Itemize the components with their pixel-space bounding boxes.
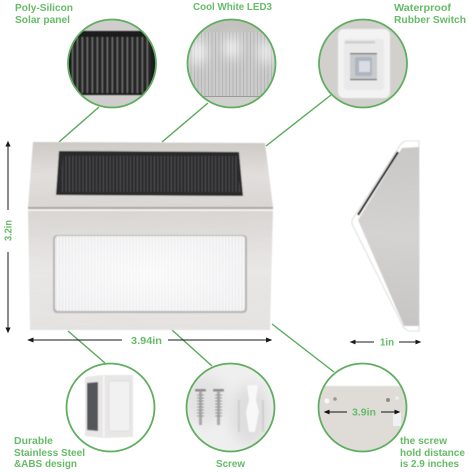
callout: waterproof rubber switch detail — [318, 18, 410, 110]
label: the screw hold distance is 2.9 inches: the screw — [400, 436, 447, 447]
product: solar step light front view — [26, 140, 276, 332]
leader lines — [59, 95, 334, 372]
label: Screw: Screw — [216, 459, 245, 470]
top face with solar panel — [26, 140, 276, 210]
dimension: width 3.94in: 3.94in — [131, 336, 162, 347]
label: the screw hold distance is 2.9 inches: is 2.9 inches — [400, 459, 459, 470]
product: side view — [352, 141, 421, 331]
callout: stainless steel and ABS design — [65, 362, 157, 454]
label: Durable Stainless Steel &ABS design: Durable — [14, 436, 53, 447]
callout: cool white LED detail — [186, 18, 278, 110]
label: Waterproof Rubber Switch: Waterproof — [394, 3, 452, 14]
callout: screws and anchors — [183, 362, 277, 454]
label: Cool White LED3: Cool White LED3 — [193, 2, 272, 13]
label: Waterproof Rubber Switch: Rubber Switch — [394, 15, 466, 26]
label: Poly-Silicon Solar panel: Solar panel — [15, 15, 70, 26]
callout: screw hole distance — [317, 362, 409, 454]
dimension: height 3.2in: 3.2in — [4, 220, 14, 241]
label: Poly-Silicon Solar panel: Poly-Silicon — [15, 3, 73, 14]
dimension: width 3.94in — [28, 336, 271, 347]
dimension: depth 1in — [351, 338, 420, 348]
callout: screw hole distance: 3.9in — [352, 408, 376, 418]
label: Durable Stainless Steel &ABS design: &ABS design — [14, 459, 77, 470]
callout: solar panel detail — [66, 18, 158, 110]
dimension: depth 1in: 1in — [380, 338, 394, 348]
front face with LED window — [26, 206, 276, 332]
dimension: height 3.2in — [4, 142, 14, 332]
label: Durable Stainless Steel &ABS design: Stainless Steel — [14, 448, 85, 459]
label: the screw hold distance is 2.9 inches: hold distance — [400, 448, 465, 459]
